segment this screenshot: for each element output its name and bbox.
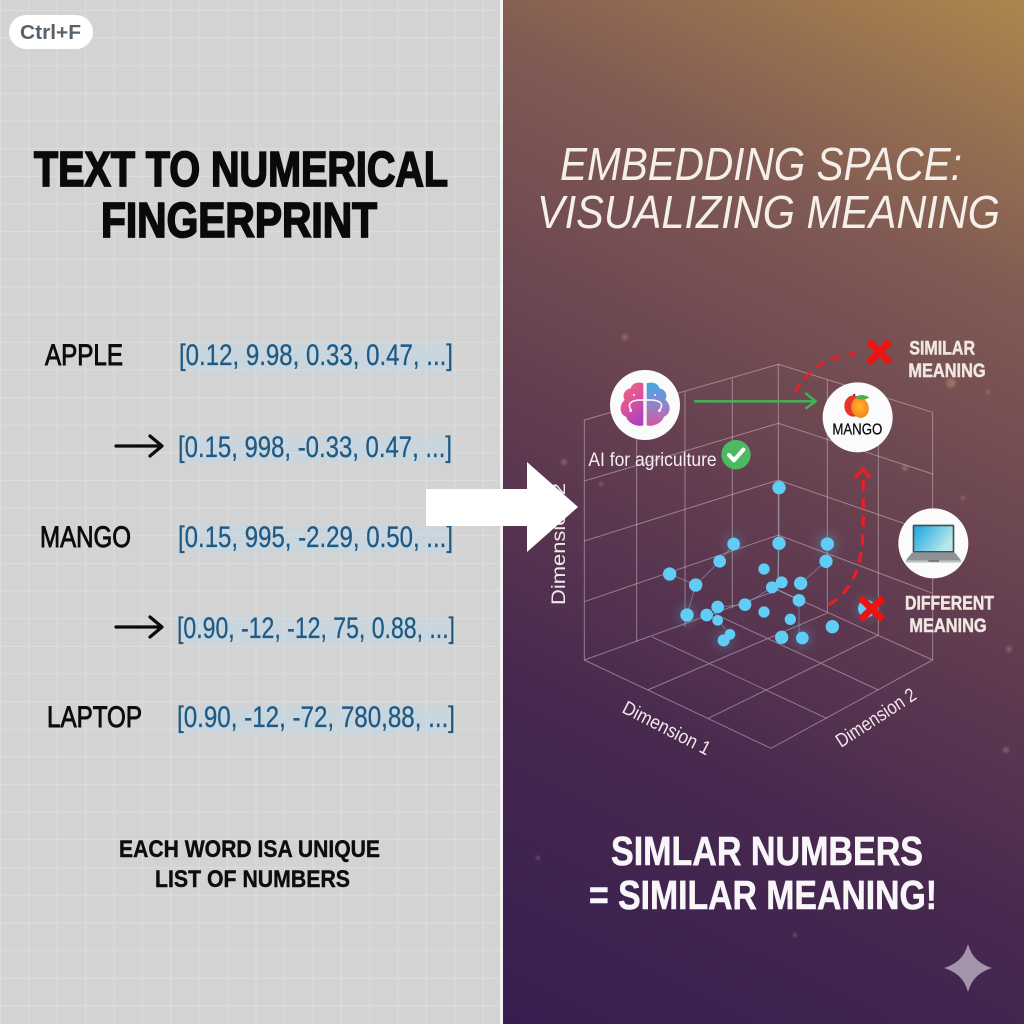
point glow [678, 534, 877, 649]
node: mango: MANGO [832, 421, 882, 438]
icon: sparkle [944, 944, 992, 992]
icon: green check [721, 440, 751, 469]
panel divider [500, 0, 503, 1024]
3D grid [584, 364, 933, 748]
title: text to numerical fingerprint: FINGERPRINT [101, 194, 377, 248]
green arrow: AI to mango [694, 393, 816, 409]
word labels: MANGO [40, 521, 131, 554]
axis label: dimension vertical: Dimension 2 [549, 483, 570, 605]
node: mango [823, 382, 893, 452]
word labels [40, 339, 142, 734]
label: similar meaning: MEANING [908, 360, 986, 382]
chart: 3D embedding scatter [584, 338, 994, 760]
label: similar meaning [908, 338, 986, 382]
panel: right embedding space background [503, 0, 1024, 1024]
conclusion: similar numbers similar meaning: = SIMILAR MEANING! [589, 872, 937, 918]
word and vector list [40, 339, 455, 734]
number vectors: [0.90, -12, -72, 780,88, ...] [177, 701, 455, 734]
caption: each word is a unique list of numbers [119, 836, 380, 893]
title: embedding space visualizing meaning [537, 138, 1000, 238]
arrow: row 2 [116, 436, 162, 456]
axis label: dimension 2: Dimension 2 [832, 685, 921, 752]
background particles [536, 334, 1012, 937]
marker: red cross top [869, 341, 890, 363]
number vectors: [0.15, 995, -2.29, 0.50, ...] [178, 521, 453, 554]
dashed arrow: similar meaning to mango [795, 353, 856, 393]
title: text to numerical fingerprint: TEXT TO NUMERICAL [34, 143, 448, 197]
node: laptop [898, 508, 968, 578]
axis label: dimension 1: Dimension 1 [619, 698, 714, 760]
number vectors [177, 339, 455, 734]
conclusion: similar numbers similar meaning: SIMLAR NUMBERS [611, 828, 923, 874]
number vectors: [0.90, -12, -12, 75, 0.88, ...] [177, 612, 455, 645]
conclusion: similar numbers similar meaning [589, 828, 937, 918]
caption: each word is a unique list of numbers: EACH WORD ISA UNIQUE [119, 836, 380, 863]
vector highlights [184, 344, 450, 733]
dashed arrow: laptop cross to mango [828, 469, 870, 605]
label: AI for agriculture: AI for agriculture [588, 450, 717, 471]
marker: red cross bottom [861, 598, 883, 619]
arrow: row 4 [116, 617, 162, 637]
data points [663, 481, 875, 646]
number vectors: [0.12, 9.98, 0.33, 0.47, ...] [179, 339, 453, 372]
arrow: big white transition arrow [426, 462, 578, 552]
label: similar meaning: SIMILAR [909, 338, 975, 360]
label: different meaning [905, 593, 994, 637]
number vectors: [0.15, 998, -0.33, 0.47, ...] [178, 431, 452, 464]
word labels: LAPTOP [47, 701, 142, 734]
badge: Ctrl+F: Ctrl+F [20, 22, 81, 44]
panel: left text-to-numbers background [0, 0, 500, 1024]
label: different meaning: DIFFERENT [905, 593, 994, 615]
point connections [670, 488, 826, 637]
badge: Ctrl+F [9, 15, 93, 49]
icon: brain circle [610, 370, 680, 440]
word labels: APPLE [45, 339, 123, 372]
title: text to numerical fingerprint [34, 143, 448, 248]
label: different meaning: MEANING [909, 615, 987, 637]
caption: each word is a unique list of numbers: LIST OF NUMBERS [155, 866, 350, 893]
title: embedding space visualizing meaning: EMBEDDING SPACE: [560, 138, 962, 190]
